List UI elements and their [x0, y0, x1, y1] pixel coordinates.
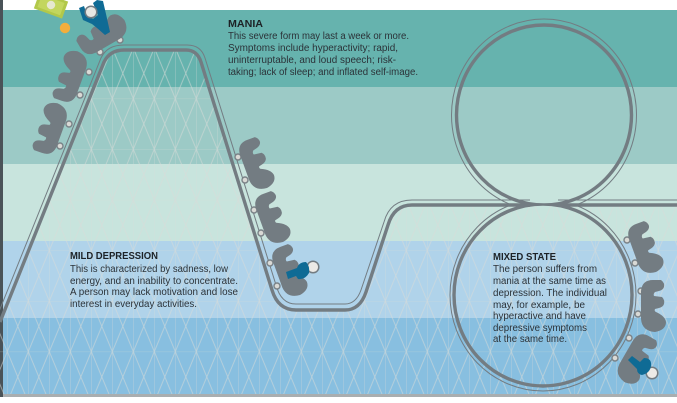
- text: mania: Symptoms include hyperactivity; rapid,: [228, 43, 398, 54]
- car on descent, middle: [251, 189, 293, 247]
- text: mixed state: may, for example, be: [493, 300, 585, 311]
- icon: money bill: [34, 0, 68, 19]
- text: mixed state: hyperactive and have: [493, 311, 586, 322]
- car in loop, middle: [635, 280, 666, 332]
- text: mixed state: MIXED STATE: [493, 252, 556, 263]
- text: mania: This severe form may last a week or more.: [228, 31, 409, 42]
- text: mixed state: depressive symptoms: [493, 323, 587, 334]
- text: mixed state: depression. The individual: [493, 288, 607, 299]
- text: mild depression: A person may lack motivation and lose: [70, 287, 238, 298]
- text: mania: [228, 19, 418, 78]
- text: mania: MANIA: [228, 19, 263, 30]
- text: mild depression: interest in everyday activities.: [70, 299, 197, 310]
- car in loop, upper: [624, 219, 666, 277]
- text: mild depression: energy, and an inability to concentrate.: [70, 276, 238, 287]
- car on descent, upper: [235, 135, 277, 193]
- car in loop with rider: [612, 330, 660, 388]
- text: mild depression: This is characterized by sadness, low: [70, 264, 229, 275]
- car on ascent, upper: [49, 47, 92, 105]
- text: mixed state: at the same time.: [493, 334, 567, 345]
- text: mild depression: MILD DEPRESSION: [70, 251, 158, 262]
- car on descent with rider: [267, 242, 319, 300]
- text: mild depression: [70, 251, 238, 310]
- text: mania: taking; lack of sleep; and inflated self-image.: [228, 67, 418, 78]
- icon: coin: [60, 23, 70, 33]
- text: mixed state: The person suffers from: [493, 264, 597, 275]
- text: mixed state: [493, 252, 607, 345]
- car with raised-arm rider at top: [74, 0, 131, 58]
- text: mania: uninterruptable, and loud speech; risk-: [228, 55, 396, 66]
- text: mixed state: mania at the same time as: [493, 276, 606, 287]
- car on ascent, lower: [29, 99, 72, 157]
